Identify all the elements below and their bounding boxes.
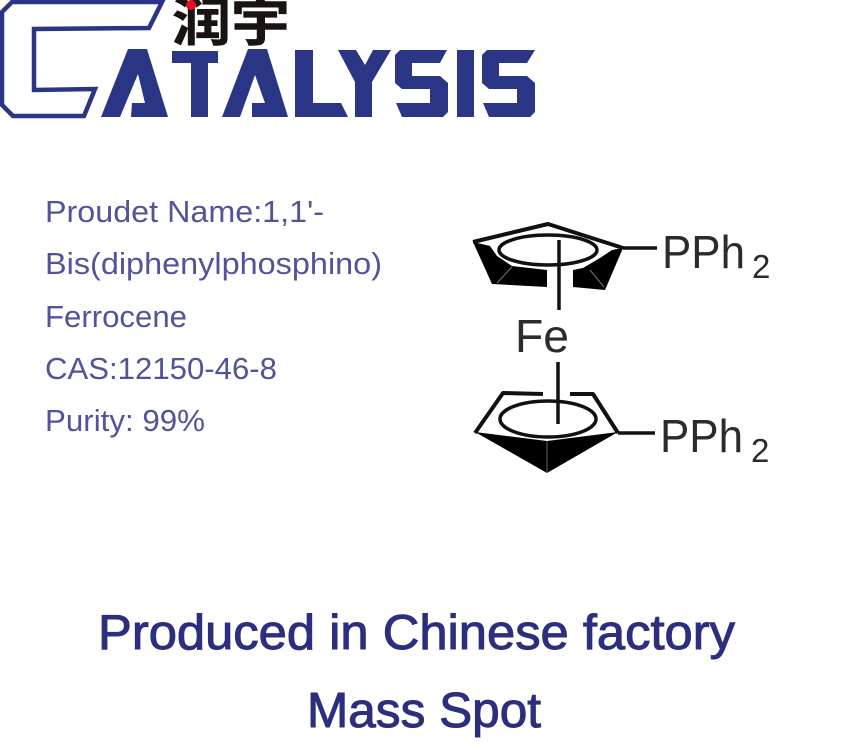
product name line 1: Proudet Name:1,1'- <box>45 194 324 229</box>
logo: solid letters ATALYSIS <box>101 49 535 117</box>
product name line 3: Ferrocene <box>45 299 187 334</box>
upper cyclopentadienyl ring <box>473 224 657 310</box>
lower PPh2 label: 2 <box>751 432 769 469</box>
lower PPh2 label: PPh <box>660 410 743 462</box>
iron atom label: Fe <box>515 310 569 362</box>
CAS number: CAS:12150-46-8 <box>45 351 277 386</box>
chemical structure: ferrocene with PPh2 groups <box>473 224 770 473</box>
lower cyclopentadienyl ring <box>475 362 655 473</box>
logo: outlined letter C <box>2 2 162 116</box>
product details text block <box>45 194 382 438</box>
upper PPh2 label: 2 <box>752 248 770 285</box>
logo: red dot <box>186 0 196 10</box>
tagline: Produced in Chinese factory: Produced in Chinese factory <box>98 606 736 660</box>
logo: Runyu Catalysis <box>2 0 535 117</box>
product name line 2: Bis(diphenylphosphino) <box>45 246 382 281</box>
tagline: Mass Spot: Mass Spot <box>307 684 541 738</box>
purity: Purity: 99% <box>45 403 205 438</box>
upper PPh2 label: PPh <box>662 226 745 278</box>
